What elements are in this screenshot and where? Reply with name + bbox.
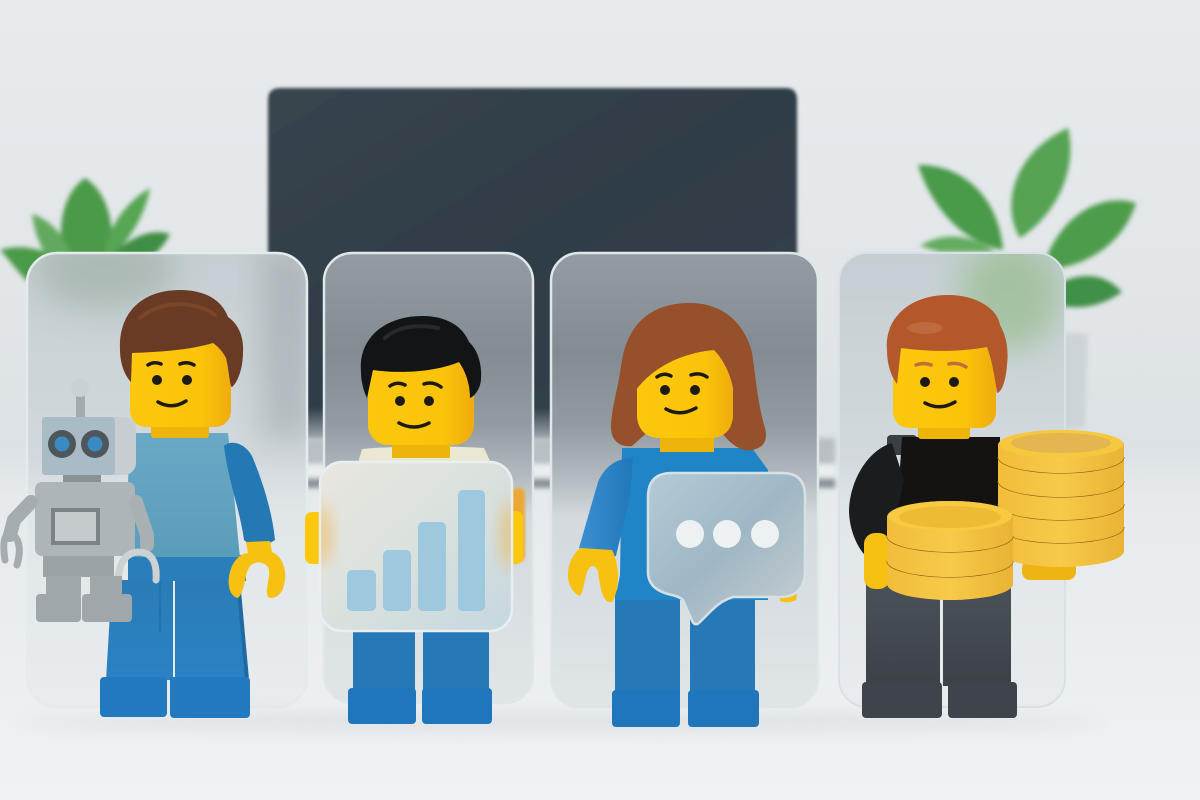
panel: glass pane 1 xyxy=(27,230,312,707)
icon: right plant xyxy=(918,128,1136,430)
panel: glass pane 3 xyxy=(551,253,818,707)
neck xyxy=(918,426,970,439)
robot arms xyxy=(4,502,156,580)
laptop screen xyxy=(268,88,797,440)
face xyxy=(916,363,966,407)
hand under coins xyxy=(1022,560,1076,580)
robot legs xyxy=(36,576,132,622)
head xyxy=(893,343,996,428)
head xyxy=(637,345,733,438)
panel: glass pane 4 xyxy=(839,240,1065,707)
hair xyxy=(120,290,243,387)
legs xyxy=(612,590,759,727)
neck xyxy=(392,442,450,458)
collar xyxy=(356,446,494,470)
face xyxy=(390,383,441,427)
fringe xyxy=(634,312,738,392)
figure 3: woman with speech bubble xyxy=(568,303,805,727)
robot body xyxy=(35,482,135,577)
face xyxy=(148,363,194,406)
bar chart xyxy=(347,490,485,611)
legs xyxy=(862,580,1017,718)
arm xyxy=(849,443,904,558)
hair xyxy=(361,316,481,398)
front coin stack xyxy=(887,501,1013,600)
hands xyxy=(305,488,525,564)
robot head xyxy=(42,417,136,484)
figure 2: black-haired man with chart xyxy=(305,316,525,724)
neck xyxy=(151,424,209,438)
icon: robot xyxy=(4,379,156,622)
legs xyxy=(100,555,250,718)
torso xyxy=(125,433,240,557)
icon: left plant xyxy=(0,178,170,282)
figure 4: red-haired man with coins xyxy=(849,295,1124,718)
arm xyxy=(224,443,275,545)
head xyxy=(368,358,474,445)
frosted chart card xyxy=(308,462,524,631)
antenna xyxy=(71,379,89,418)
hand xyxy=(568,548,618,602)
head xyxy=(130,343,231,427)
torso xyxy=(887,435,1000,545)
speech bubble xyxy=(648,473,805,624)
panel: glass pane 2 xyxy=(324,253,533,703)
legs xyxy=(348,628,492,724)
small hand xyxy=(778,590,798,602)
neck xyxy=(660,435,714,452)
torso xyxy=(615,448,768,600)
hand xyxy=(229,541,285,598)
table shadow xyxy=(20,712,1100,732)
figure 1: brown-haired man with robot xyxy=(100,290,285,718)
laptop base xyxy=(305,438,835,488)
typing dots xyxy=(676,520,779,548)
hair xyxy=(887,295,1008,393)
hand xyxy=(864,533,890,589)
arm xyxy=(579,458,633,558)
face xyxy=(657,374,707,413)
hair back xyxy=(611,303,766,450)
back coin stack xyxy=(998,430,1124,567)
